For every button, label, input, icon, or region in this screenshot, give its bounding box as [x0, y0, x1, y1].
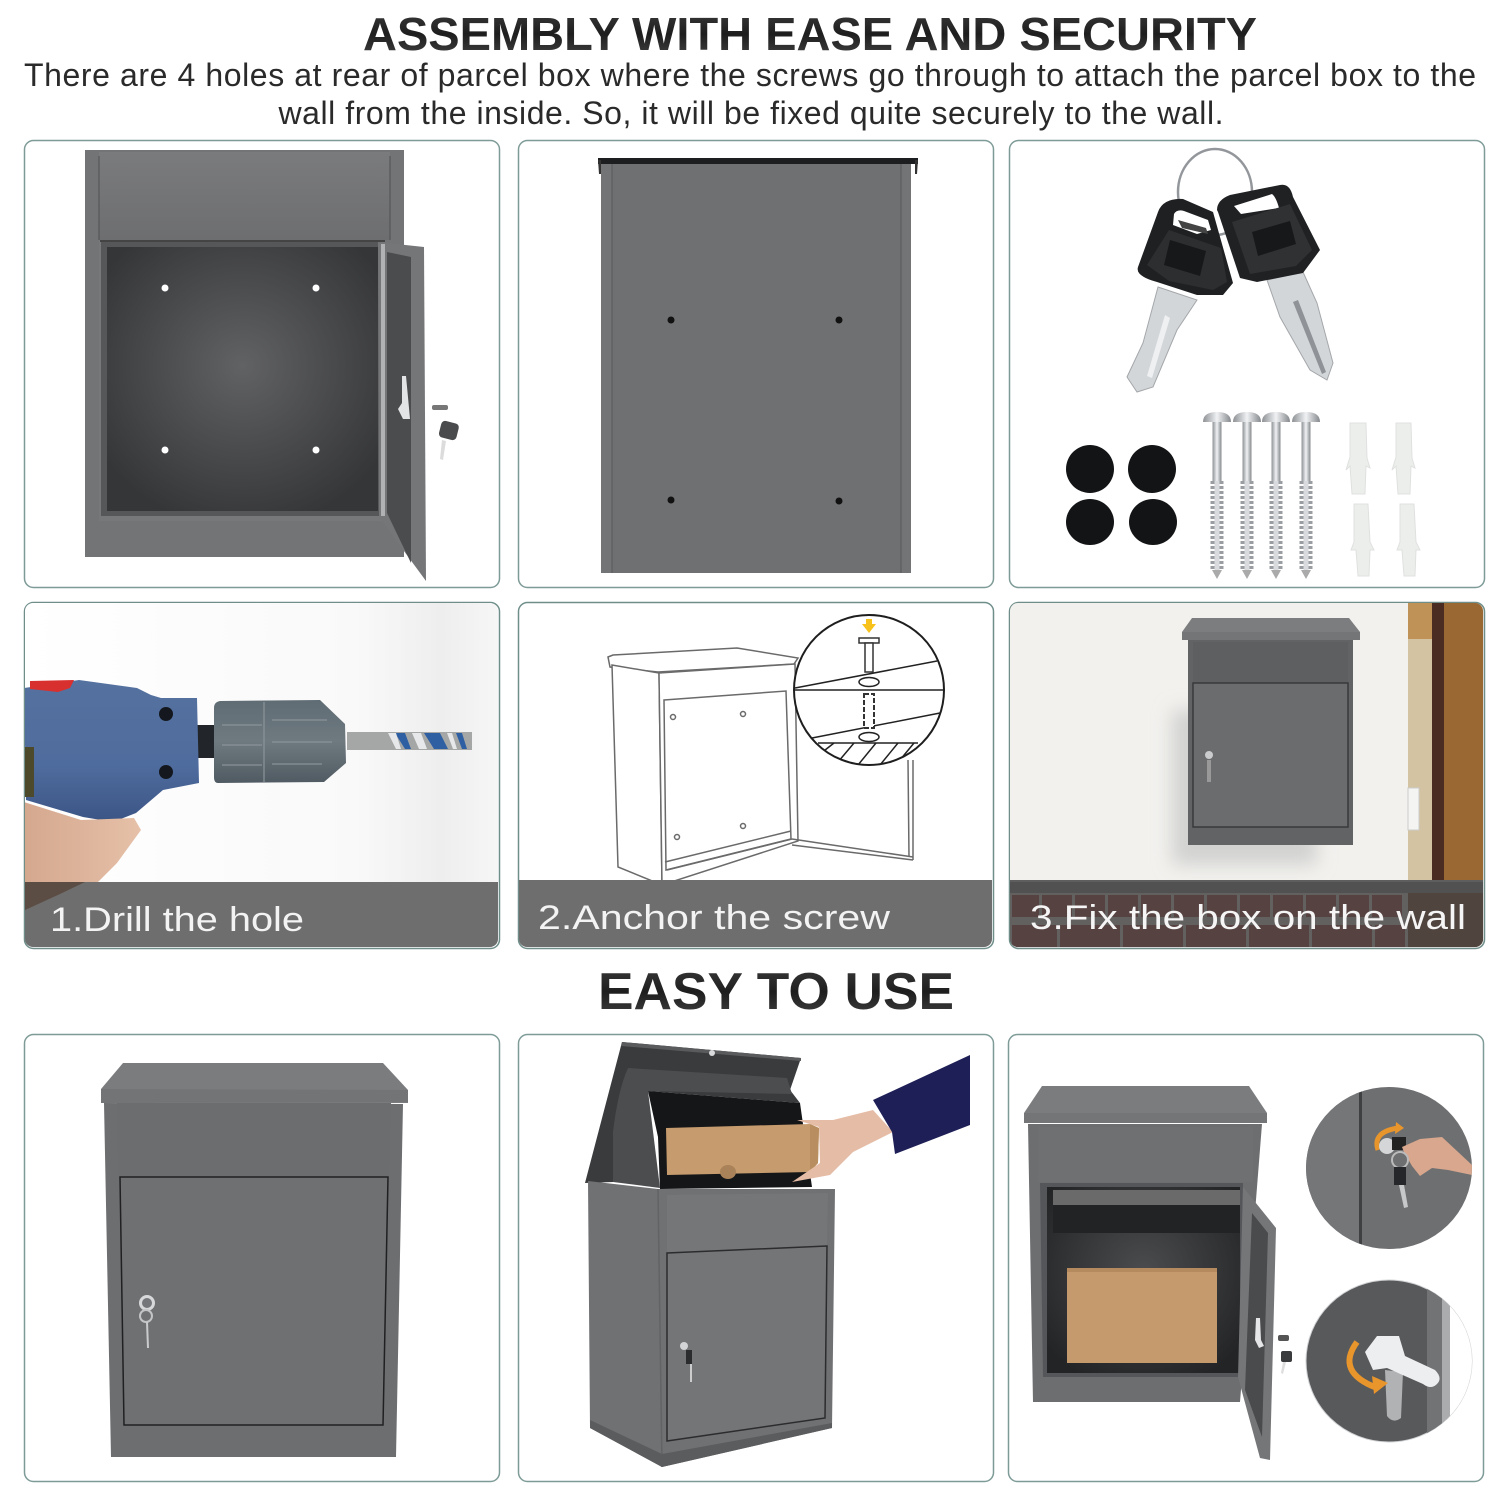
caption bar: [1010, 882, 1483, 948]
panel: open hopper with parcel: [518, 1034, 994, 1482]
icon: mounted parcel box: [1182, 618, 1360, 845]
bricks: [1010, 880, 1484, 948]
icon: drill chuck: [214, 700, 346, 783]
icon: left key: [1127, 199, 1233, 392]
caption bar: 3.Fix the box on the wall: [1030, 899, 1466, 937]
icon: hand and sleeve: [792, 1055, 970, 1182]
panel: closed box front: [24, 1034, 500, 1482]
icon: parcel: [666, 1124, 819, 1179]
icon: drill bit: [347, 732, 472, 750]
intro text: [24, 57, 1476, 131]
icon: parcel inside: [1067, 1268, 1217, 1363]
icon: door frame: [1408, 603, 1484, 893]
caption bar: 2.Anchor the screw: [538, 899, 891, 937]
icon: open box: [1024, 1086, 1292, 1460]
icon: wall plugs: [1346, 423, 1420, 576]
diagram: box outline: [608, 648, 913, 885]
icon: rubber washers: [1066, 445, 1177, 545]
panel: back of box: [518, 140, 994, 588]
caption bar: [519, 880, 992, 948]
icon: latch rotation detail: [1306, 1280, 1474, 1450]
panel: open box interior: [24, 140, 500, 588]
icon: drill body: [24, 680, 199, 822]
intro text: There are 4 holes at rear of parcel box where the screws go through to attach the parcel box to the: [24, 57, 1476, 93]
panel: step 2 anchor the screw: [518, 602, 994, 948]
panel: open box with parcel and detail circles: [1008, 1034, 1484, 1482]
icon: drill neck: [196, 725, 214, 758]
panel: step 3 fix the box: [1010, 602, 1484, 948]
icon: open lid: [585, 1042, 812, 1189]
open door: [378, 242, 426, 581]
icon: key in lock detail: [1306, 1085, 1472, 1255]
icon: parcel box body: [588, 1181, 835, 1467]
icon: screws: [1203, 412, 1320, 579]
icon: hand: [24, 802, 141, 883]
caption bar: 1.Drill the hole: [50, 901, 304, 939]
icon: rear holes: [668, 316, 842, 504]
icon: right key: [1217, 185, 1333, 380]
panel: step 1 drill the hole: [24, 602, 500, 948]
icon: mounting holes: [162, 284, 320, 454]
icon: key ring: [1178, 149, 1252, 235]
icon: lock and key: [140, 1296, 154, 1348]
diagram: magnified screw circle: [794, 615, 944, 765]
title: assembly with ease and security: ASSEMBLY WITH EASE AND SECURITY: [363, 8, 1257, 60]
caption bar: [25, 882, 498, 948]
icon: small key and lock: [432, 405, 460, 460]
intro text: wall from the inside. So, it will be fixed quite securely to the wall.: [278, 95, 1224, 131]
panel: accessories: [1010, 140, 1484, 588]
heading: easy to use: EASY TO USE: [598, 963, 954, 1021]
